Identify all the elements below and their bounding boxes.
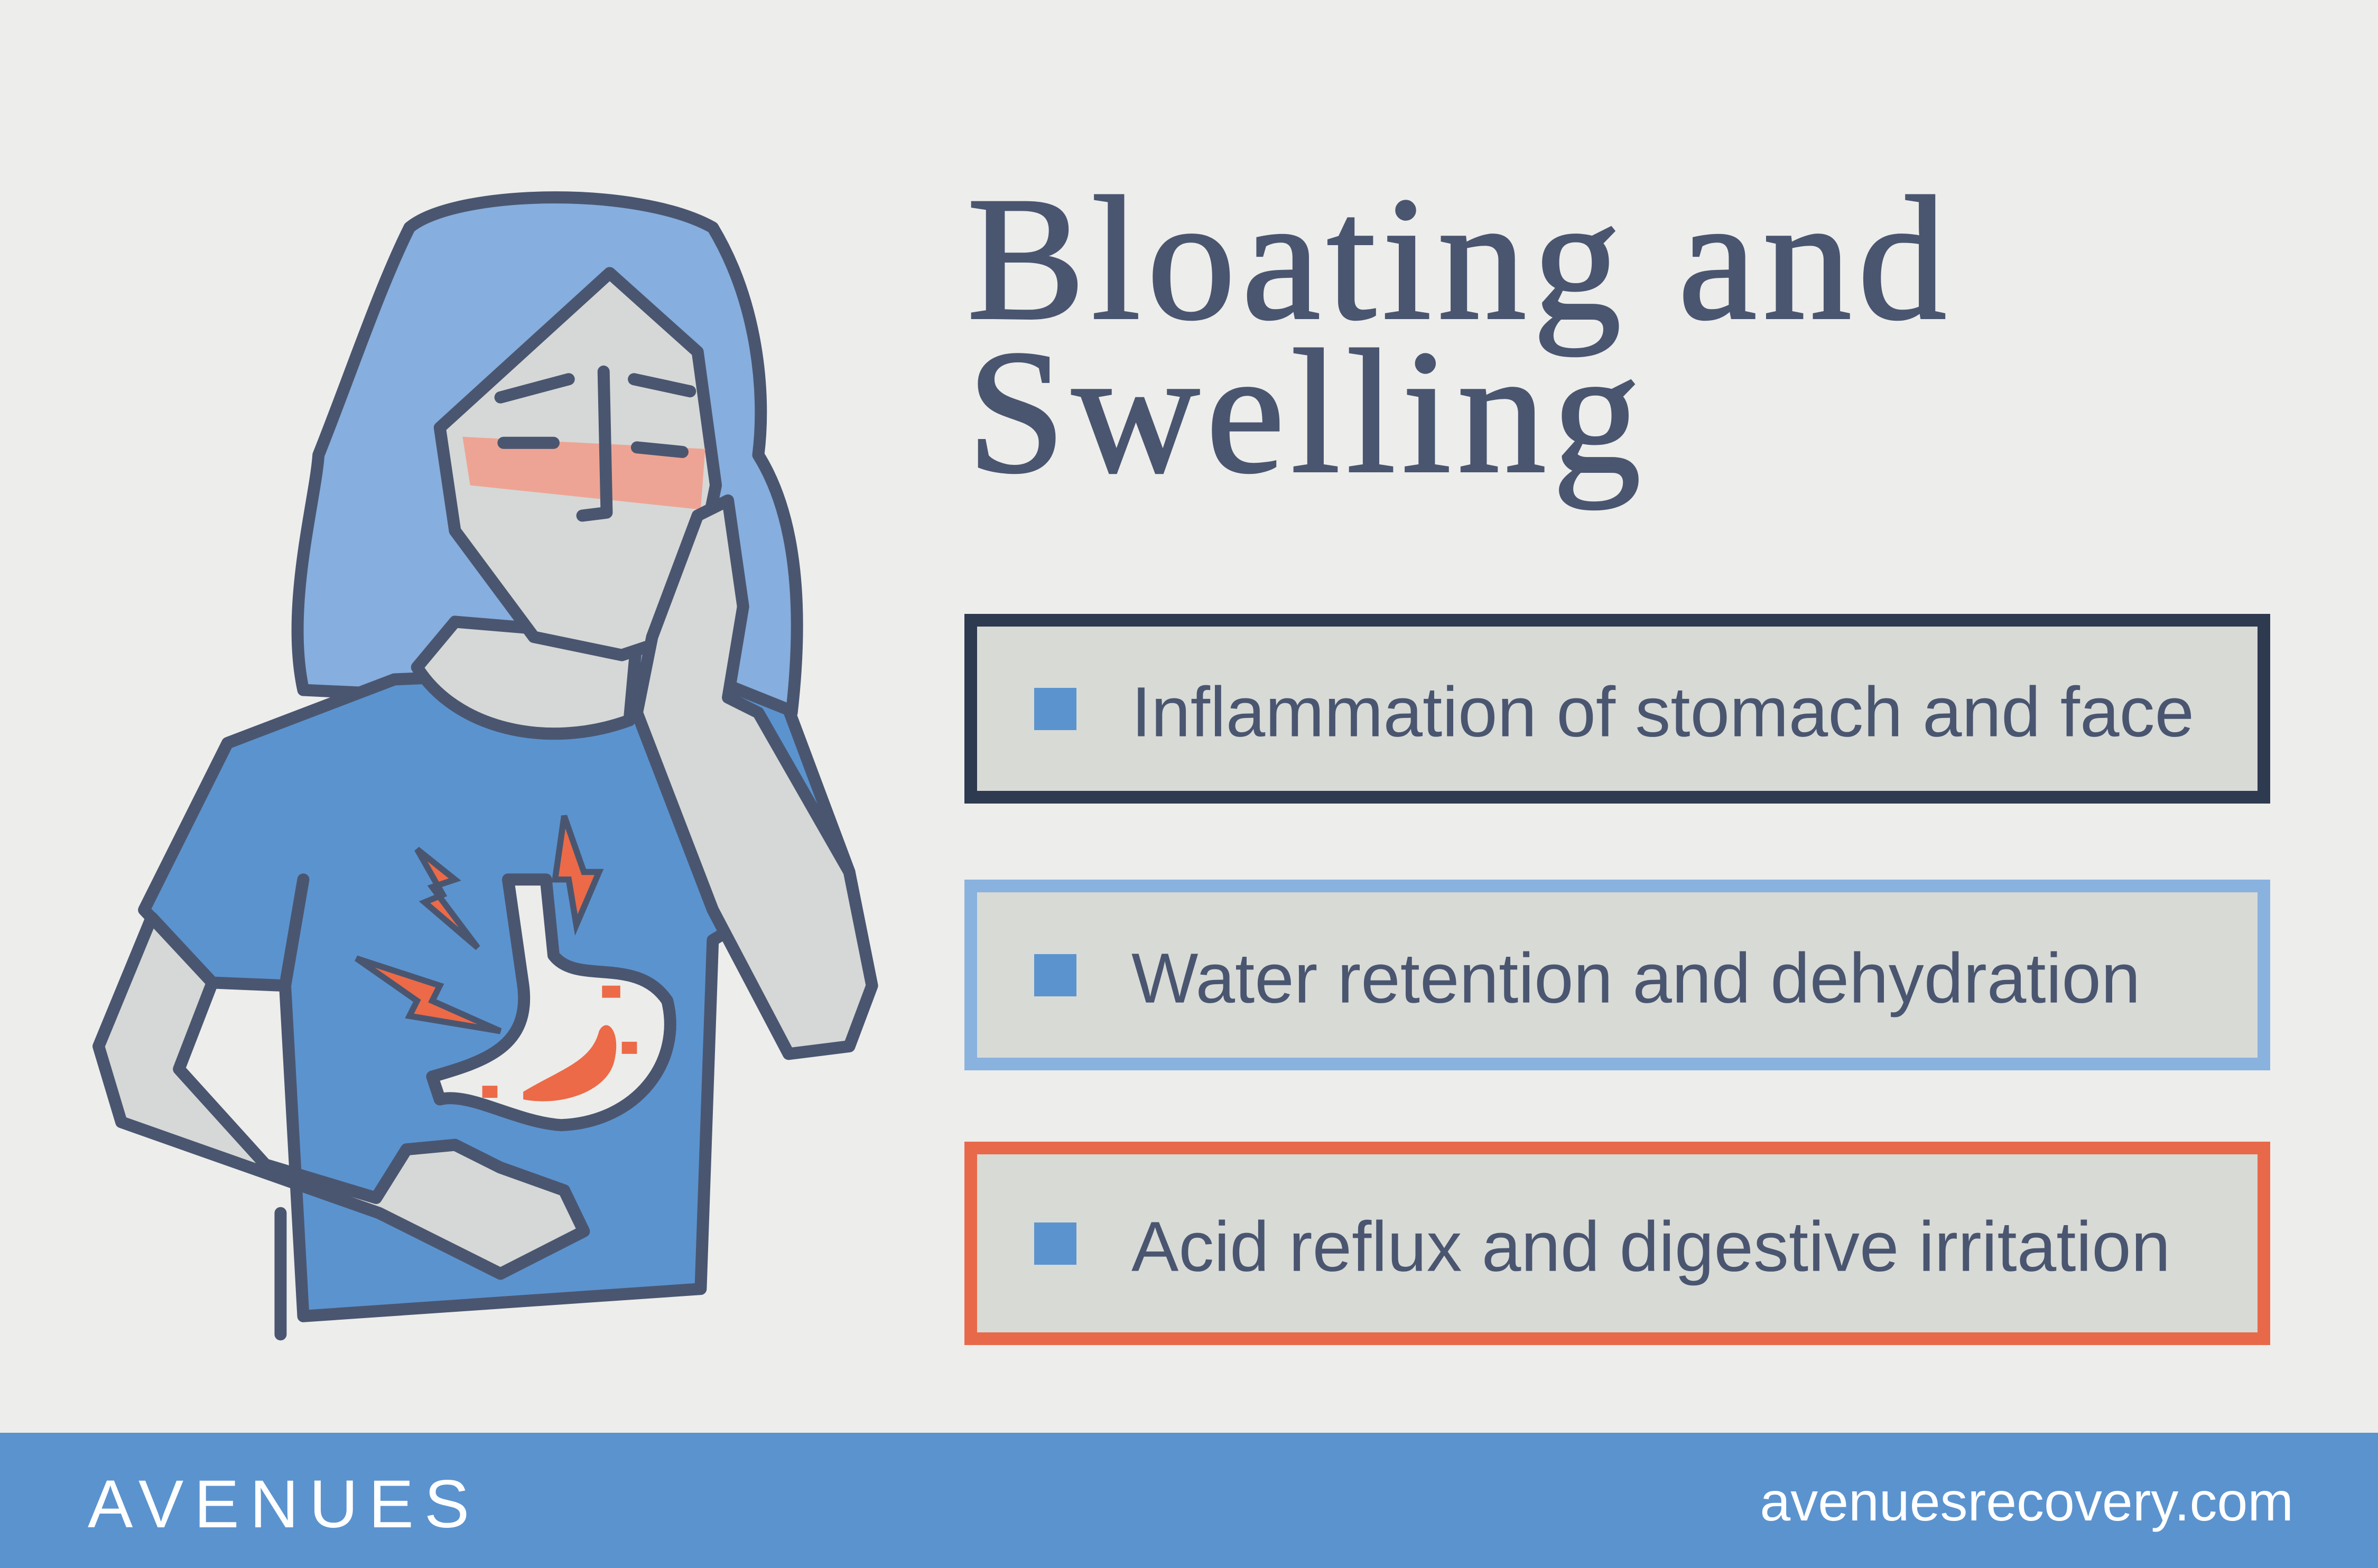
neck — [417, 622, 637, 734]
lightning bolts — [356, 816, 599, 1031]
bullet — [1034, 1222, 1076, 1265]
stomach — [432, 880, 670, 1125]
bullet — [1034, 954, 1076, 996]
hair — [298, 198, 797, 713]
bullet — [1034, 688, 1076, 730]
box: inflammation — [964, 614, 2270, 804]
box: water retention — [964, 880, 2270, 1070]
title: Bloating and — [967, 161, 1953, 357]
footer — [0, 1433, 2378, 1568]
text: Acid reflux and digestive irritation — [1131, 1207, 2170, 1286]
face — [440, 273, 716, 655]
logo: AVENUES — [88, 1467, 480, 1542]
shirt — [144, 667, 849, 1316]
eyes, brows, nose — [500, 371, 690, 516]
raised arm — [637, 500, 872, 1054]
box: acid reflux — [964, 1142, 2270, 1345]
lower arm — [99, 918, 584, 1274]
stomach irritation — [482, 986, 637, 1102]
torso lines — [281, 880, 303, 1334]
title: Swelling — [967, 314, 1647, 510]
url: avenuesrecovery.com — [1760, 1471, 2293, 1533]
blush — [462, 437, 705, 510]
text: Water retention and dehydration — [1131, 939, 2140, 1018]
title — [967, 161, 1953, 510]
text: Inflammation of stomach and face — [1131, 673, 2194, 751]
